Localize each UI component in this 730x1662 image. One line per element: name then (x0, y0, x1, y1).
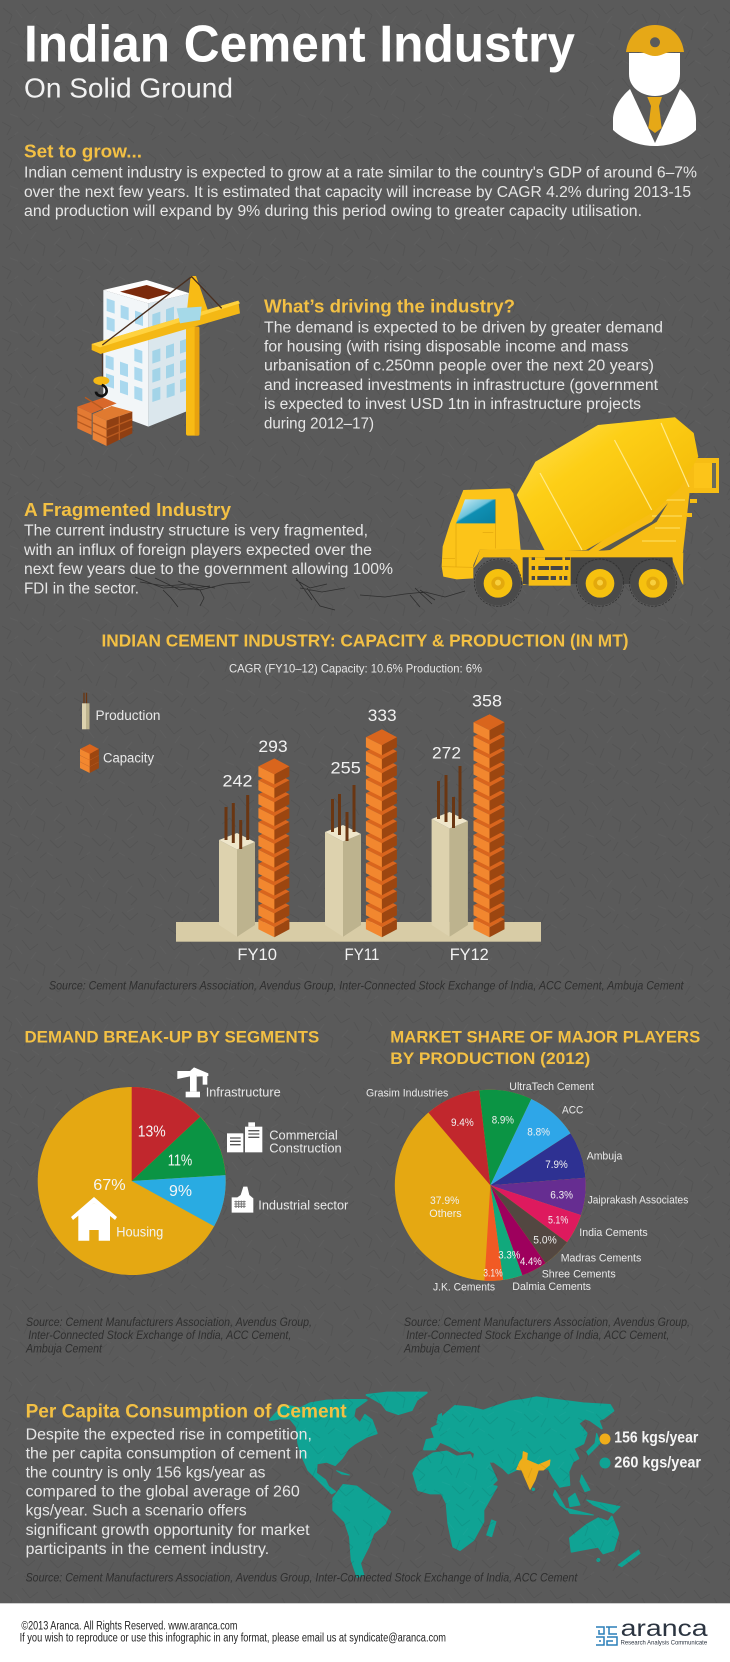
pie values: 6.3% (550, 1189, 573, 1201)
logo: aranca: Research Analysis Communicate (621, 1639, 707, 1646)
FY11 capacity bricks (366, 729, 397, 937)
section: set to grow: over the next few years. It is estimated that capacity will increase by CAGR 4.2% during 2013-15 (24, 184, 691, 201)
section: per capita consumption: Despite the expected rise in competition, (26, 1426, 312, 1443)
section: per capita consumption: kgs/year. Such a scenario offers (26, 1503, 247, 1520)
source: market share pie: Source: Cement Manufacturers Association, Avendus Group, (404, 1317, 690, 1329)
heading: market share (390, 1027, 700, 1068)
FY11 production pillar (325, 785, 361, 937)
section: a fragmented industry: with an influx of foreign players expected over the (23, 542, 372, 559)
section: what's driving the industry: What’s driving the industry? (264, 297, 515, 317)
section: set to grow: and production will expand by 9% during this period owing to greater capacity utilisation. (24, 203, 642, 220)
section: set to grow: Indian cement industry is expected to grow at a rate similar to the country's GDP of around 6–7% (24, 165, 697, 182)
pie values: 9.4% (451, 1117, 474, 1129)
chart axis labels (237, 945, 489, 964)
section: per capita consumption: participants in the cement industry. (26, 1541, 269, 1558)
section: a fragmented industry: next few years due to the government allowing 100% (24, 561, 393, 578)
pie chart: market share (366, 1081, 689, 1294)
section: what's driving the industry: urbanisation of c.250mn people over the next 20 years) (264, 358, 654, 375)
heading: market share: BY PRODUCTION (2012) (390, 1049, 590, 1068)
footer copyright: If you wish to reproduce or use this infographic in any format, please email us at syndicate@aranca.com (20, 1633, 446, 1645)
source: market share pie (403, 1317, 690, 1355)
pie chart: demand by segment (38, 1087, 226, 1275)
section: a fragmented industry: A Fragmented Industry (24, 500, 231, 520)
legend: production: Production (96, 708, 160, 723)
pie values: 3.1% (483, 1268, 503, 1280)
chart value labels: 333 (368, 706, 397, 725)
chart heading: INDIAN CEMENT INDUSTRY: CAPACITY & PRODUCTION (IN MT) (102, 631, 628, 651)
legend: production (82, 693, 160, 729)
FY10 production pillar (219, 795, 255, 937)
source: market share pie: Ambuja Cement (403, 1343, 481, 1355)
section: what's driving the industry: during 2012–17) (264, 415, 374, 432)
segment label: commercial construction: Construction (269, 1141, 342, 1156)
chart value labels: 242 (222, 772, 252, 791)
pie chart: demand by segment: 11% (168, 1153, 192, 1170)
pie labels: Ambuja (587, 1150, 623, 1162)
pie labels: Jaiprakash Associates (588, 1195, 689, 1207)
footer copyright (20, 1620, 446, 1645)
logo: aranca: aranca (621, 1615, 708, 1641)
section: set to grow: Set to grow... (24, 142, 142, 162)
segment label: industrial sector (232, 1187, 349, 1213)
chart value labels (222, 692, 502, 791)
map legend (600, 1430, 701, 1471)
segment label: industrial sector: Industrial sector (258, 1197, 349, 1212)
legend: capacity (80, 744, 154, 773)
section: set to grow (24, 142, 697, 220)
pie chart: demand by segment: Housing (116, 1225, 163, 1240)
chart subheading: CAGR: CAGR (FY10–12) Capacity: 10.6% Production: 6% (229, 661, 482, 675)
pie labels (366, 1081, 689, 1294)
section: per capita consumption: compared to the global average of 260 (26, 1484, 300, 1501)
legend: capacity: Capacity (103, 750, 154, 765)
illustration: cement mixer truck (442, 417, 719, 606)
pie values: 37.9% (430, 1195, 459, 1207)
pie values: 8.9% (492, 1114, 514, 1126)
subtitle: On Solid Ground (24, 73, 233, 104)
section: per capita consumption: the country is only 156 kgs/year as (26, 1464, 266, 1481)
segment label: commercial construction: Commercial (269, 1127, 338, 1142)
chart value labels: 272 (432, 743, 461, 762)
chart axis labels: FY10 (237, 945, 277, 964)
source: demand pie: Inter-Connected Stock Exchange of India, ACC Cement, (28, 1330, 291, 1342)
segment label: commercial construction (227, 1122, 342, 1156)
source: capacity chart: Source: Cement Manufacturers Association, Avendus Group, Inter-Connected Stock Exchange of India, ACC Cement, Ambuja Cement (49, 980, 684, 992)
footer band (0, 1603, 730, 1662)
pie values: Others (429, 1208, 462, 1220)
source: demand pie: Source: Cement Manufacturers Association, Avendus Group, (26, 1317, 312, 1329)
pie values: 7.9% (545, 1159, 568, 1171)
section: per capita consumption: the per capita consumption of cement in (26, 1445, 307, 1462)
section: a fragmented industry (23, 500, 393, 597)
bar chart: capacity and production (176, 692, 541, 964)
section: what's driving the industry (264, 297, 663, 432)
map: India highlight (517, 1452, 550, 1489)
pie values: 5.0% (533, 1235, 557, 1247)
section: a fragmented industry: The current industry structure is very fragmented, (24, 523, 368, 540)
world map (270, 1393, 640, 1577)
title: Indian Cement Industry (24, 16, 575, 74)
chart value labels: 358 (472, 692, 502, 711)
section: per capita consumption: Per Capita Consumption of Cement (26, 1402, 347, 1423)
section: what's driving the industry: and increased investments in infrastructure (government (264, 377, 659, 394)
FY10 capacity bricks (258, 758, 289, 937)
pie labels: J.K. Cements (433, 1282, 495, 1294)
pie chart: demand by segment: 13% (138, 1124, 166, 1141)
section: per capita consumption: significant growth opportunity for market (26, 1522, 310, 1539)
section: a fragmented industry: FDI in the sector. (24, 580, 139, 597)
segment label: infrastructure: Infrastructure (206, 1085, 281, 1100)
section: what's driving the industry: The demand is expected to be driven by greater demand (264, 319, 663, 336)
section: what's driving the industry: for housing (with rising disposable income and mass (264, 339, 629, 356)
segment label: infrastructure (177, 1067, 281, 1100)
logo: aranca (596, 1615, 708, 1646)
source: demand pie (25, 1317, 312, 1355)
source: demand pie: Ambuja Cement (25, 1343, 103, 1355)
icon: house (71, 1197, 117, 1241)
chart value labels: 255 (330, 758, 361, 777)
chart value labels: 293 (258, 737, 288, 756)
pie values: 3.3% (498, 1249, 520, 1261)
ground cracks (135, 577, 465, 610)
section: what's driving the industry: is expected to invest USD 1tn in infrastructure projects (264, 396, 641, 413)
pie labels: India Cements (579, 1227, 648, 1239)
section: per capita consumption (26, 1402, 347, 1558)
heading: market share: MARKET SHARE OF MAJOR PLAYERS (390, 1027, 700, 1046)
pie labels: UltraTech Cement (509, 1081, 594, 1093)
pie values: 5.1% (548, 1214, 568, 1226)
pie values: 4.4% (520, 1256, 542, 1268)
heading: demand break-up: DEMAND BREAK-UP BY SEGMENTS (24, 1027, 319, 1046)
footer copyright: ©2013 Aranca. All Rights Reserved. www.aranca.com (21, 1620, 237, 1632)
chart axis labels: FY11 (344, 945, 379, 964)
source: per capita: Source: Cement Manufacturers Association, Avendus Group, Inter-Connected Stock Exchange of India, ACC Cement (26, 1573, 578, 1585)
pie labels: ACC (562, 1105, 583, 1117)
pie values (429, 1114, 573, 1280)
icon: construction worker (613, 25, 696, 146)
pie labels: Dalmia Cements (512, 1281, 591, 1293)
pie chart: demand by segment: 9% (169, 1183, 192, 1200)
FY12 production pillar (432, 766, 468, 937)
source: market share pie: Inter-Connected Stock Exchange of India, ACC Cement, (406, 1330, 669, 1342)
FY12 capacity bricks (474, 714, 504, 937)
pie values: 8.8% (527, 1127, 550, 1139)
pie labels: Madras Cements (561, 1253, 642, 1265)
chart axis labels: FY12 (450, 945, 489, 964)
pie labels: Grasim Industries (366, 1088, 449, 1100)
map legend: 260 kgs/year (614, 1454, 701, 1471)
map legend: 156 kgs/year (614, 1430, 698, 1447)
illustration: building and crane (77, 276, 240, 446)
pie labels: Shree Cements (542, 1269, 616, 1281)
pie chart: demand by segment: 67% (93, 1177, 126, 1194)
